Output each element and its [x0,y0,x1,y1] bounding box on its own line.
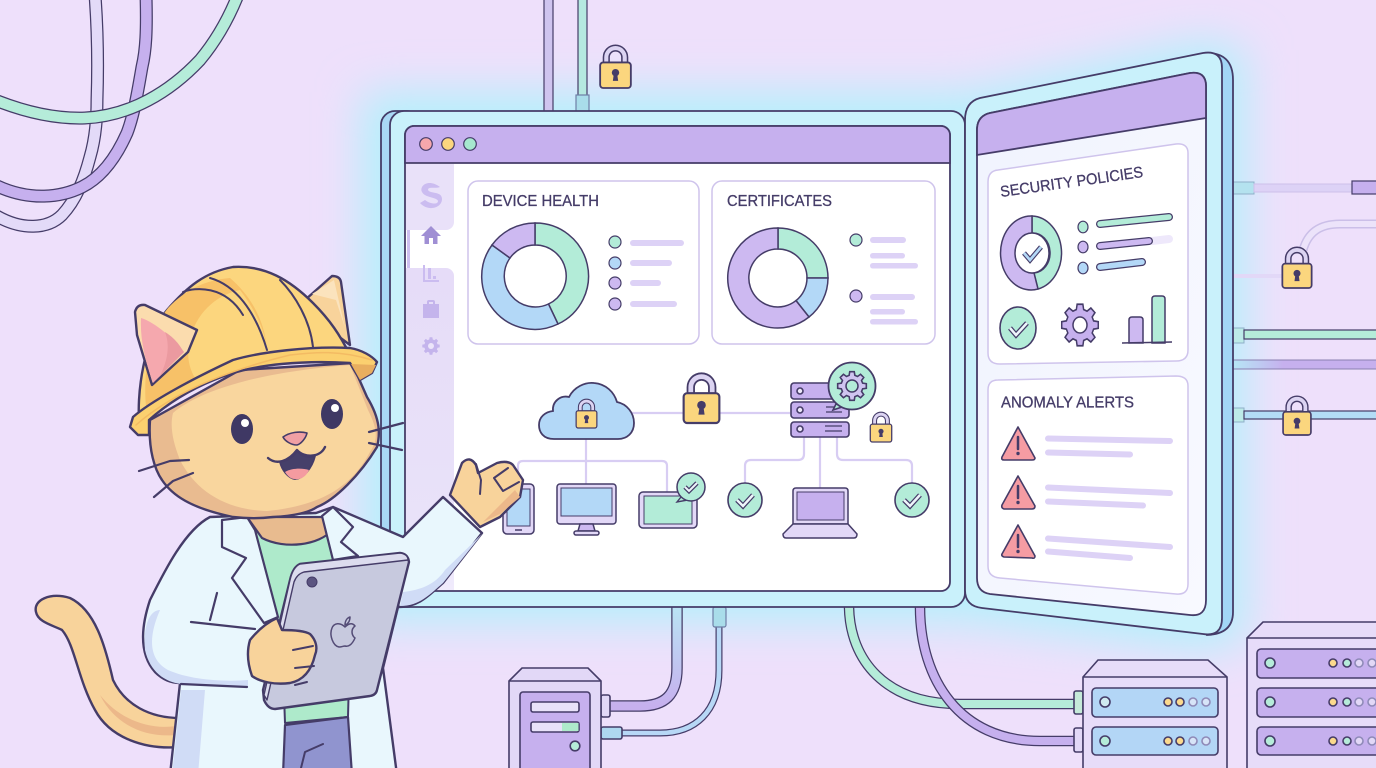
laptop icon [783,488,857,538]
check circle left [728,483,762,517]
gear speech bubble [828,362,876,410]
chart icon [423,265,439,282]
legend: certificates [850,234,918,324]
top cables [544,0,589,112]
legend: device health [609,236,684,310]
top-left cables [0,0,238,226]
policy list [1078,217,1169,274]
window screen [405,126,950,591]
eyes [231,399,343,444]
donut: certificates [728,228,828,328]
side panel header [977,73,1206,155]
nose [283,432,307,445]
window control dots [420,138,476,150]
left ear [135,305,197,385]
top padlock [600,48,631,88]
panel glow [362,40,1246,650]
hat brim [130,348,377,435]
heading: certificates: CERTIFICATES [727,193,832,210]
sidebar logo [420,183,442,208]
gear icon [1062,304,1098,346]
title bar [405,126,950,163]
right cables [1233,181,1376,422]
tablet [263,553,409,709]
whiskers [139,423,403,497]
right padlock upper [1282,250,1312,288]
shield donut [1001,216,1062,290]
rack server blue [1074,660,1227,768]
trousers [283,717,352,768]
cat engineer [36,267,523,768]
hard hat [130,267,377,435]
apple logo [331,617,355,647]
right ear [305,276,350,345]
bottom cables [605,607,1076,741]
alert row 2 [1002,476,1170,509]
rack server purple [1247,622,1376,768]
head [139,363,403,518]
server stack [791,383,849,437]
mouth [268,447,325,462]
alert row 1 [1002,427,1170,460]
central padlock [684,377,719,423]
heading: security policies: SECURITY POLICIES [999,164,1144,201]
shirt [250,525,350,723]
card: security policies [988,144,1188,364]
left sleeve cuff line [181,684,247,687]
neck [247,517,332,545]
right lapel [322,507,358,560]
briefcase icon [423,300,439,318]
card: device health [468,181,699,344]
tower server [509,668,622,768]
check bubble [677,473,705,502]
coat shading [145,534,482,768]
monitor icon [557,484,616,535]
check badge [1000,307,1036,349]
small padlock [870,414,892,442]
tail [36,596,180,747]
phone icon [503,484,534,534]
alert row 3 [1002,525,1170,558]
coat [143,497,482,768]
main dashboard window [381,111,965,607]
sidebar [406,164,454,590]
home icon [421,226,441,244]
bar chart icon [1122,296,1172,343]
raised hand [450,459,523,527]
donut: device health [482,223,589,329]
cloud with lock [539,383,634,439]
settings icon [422,337,440,355]
tablet icon [639,492,697,528]
heading: anomaly alerts: ANOMALY ALERTS [1001,394,1134,412]
left lapel [222,517,278,623]
sleeve fold [191,593,255,629]
connector bottom [713,607,726,627]
network diagram [503,362,929,538]
side panel [965,53,1233,635]
connection lines [518,413,912,492]
card: certificates [712,181,935,344]
heading: device health: DEVICE HEALTH [482,193,599,210]
check circle right [895,483,929,517]
side panel screen [977,73,1206,615]
holding hand [248,618,316,685]
card: anomaly alerts [988,376,1188,594]
right padlock lower [1283,399,1311,435]
